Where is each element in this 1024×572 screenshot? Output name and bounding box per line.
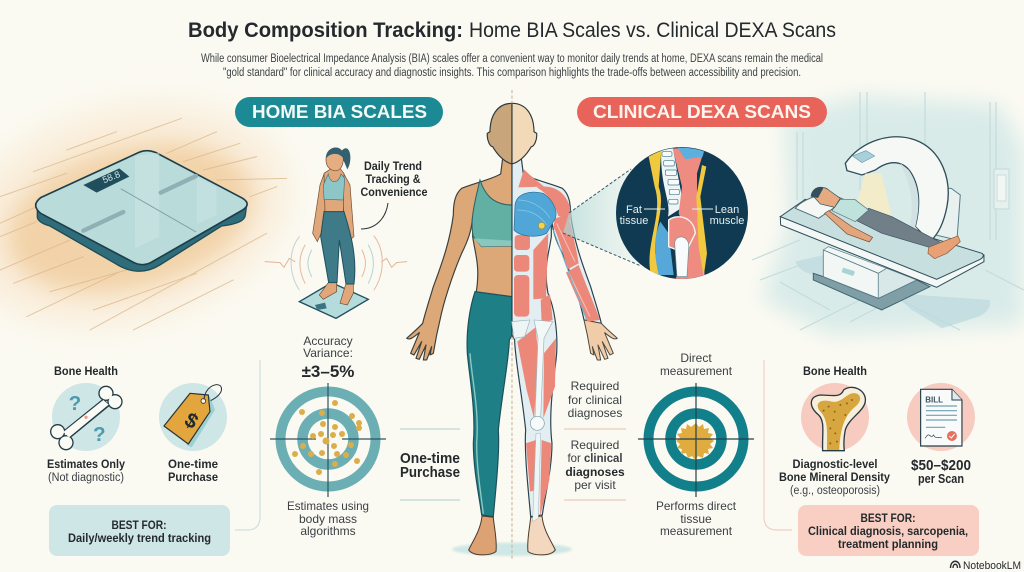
caption: estimates using algorithms: Estimates using xyxy=(287,499,369,513)
leggings xyxy=(467,292,512,517)
sports bra xyxy=(472,180,512,247)
left feature bracket xyxy=(235,360,260,530)
block: diagnostic bone density: Bone Mineral Density xyxy=(779,470,890,484)
icon: woman standing on scale xyxy=(265,147,407,318)
text block: required for clinical diagnoses: diagnoses xyxy=(565,465,625,479)
block: one-time purchase tag: Purchase xyxy=(168,470,218,484)
best for box: clinical xyxy=(798,505,979,556)
block: one-time purchase tag xyxy=(159,383,227,484)
head and hair xyxy=(342,148,350,169)
block: bone health estimates: ? xyxy=(93,423,106,446)
feet xyxy=(319,282,337,299)
left half skin xyxy=(407,158,512,360)
block: bone health estimates: (Not diagnostic) xyxy=(48,472,124,484)
text block: required for clinical diagnoses: per visit xyxy=(574,478,616,492)
block: bone health estimates: Estimates Only xyxy=(47,457,125,471)
title: Home BIA Scales vs. Clinical DEXA Scans xyxy=(469,19,836,42)
icon: bathroom scale: 58.8 xyxy=(101,169,122,185)
cost label: one-time purchase: One-time xyxy=(400,450,460,467)
best for box: home: Daily/weekly trend tracking xyxy=(68,533,211,545)
text block: required for clinical diagnoses xyxy=(564,379,626,500)
best for box: home xyxy=(49,505,230,556)
intro paragraph xyxy=(201,53,823,79)
caption: performs direct measurement: Performs direct xyxy=(656,499,737,513)
accuracy variance label: ±3–5% xyxy=(302,362,354,381)
table xyxy=(780,217,984,287)
callout: daily trend xyxy=(360,161,428,229)
text block: required for clinical diagnoses: for clinical xyxy=(568,393,622,407)
zoom callout: fat tissue and lean muscle xyxy=(563,147,748,280)
block: diagnostic bone density: (e.g., osteoporosis) xyxy=(790,485,880,497)
zoom callout: fat tissue and lean muscle: muscle xyxy=(710,215,744,227)
heading pill: Home BIA Scales: HOME BIA SCALES xyxy=(252,102,427,122)
block: DEXA bill cost: $50–$200 xyxy=(911,457,971,474)
block: bone health estimates: ? xyxy=(69,392,81,415)
caption: direct measurement xyxy=(660,351,733,378)
title: Body Composition Tracking: xyxy=(188,19,463,42)
zoom callout: fat tissue and lean muscle: Fat xyxy=(626,204,642,216)
caption: estimates using algorithms: body mass xyxy=(299,512,357,526)
caption: estimates using algorithms: algorithms xyxy=(300,524,356,538)
accuracy variance label xyxy=(302,334,354,381)
heading pill: Clinical DEXA Scans: CLINICAL DEXA SCANS xyxy=(593,102,811,122)
NotebookLM watermark: NotebookLM xyxy=(963,560,1021,572)
block: one-time purchase tag: $ xyxy=(181,408,202,434)
block: DEXA bill cost: per Scan xyxy=(918,472,964,486)
heading pill: Clinical DEXA Scans xyxy=(577,97,827,127)
cost label: one-time purchase: Purchase xyxy=(400,464,460,481)
block: bone health estimates xyxy=(47,366,125,484)
block: diagnostic bone density: Bone Health xyxy=(803,366,867,378)
left foot xyxy=(469,516,496,555)
left head xyxy=(487,103,512,164)
block: DEXA bill cost: BILL xyxy=(925,395,943,404)
best for box: home: BEST FOR: xyxy=(112,520,166,532)
centre dashed divider xyxy=(510,90,513,560)
block: one-time purchase tag: One-time xyxy=(168,457,218,471)
caption: performs direct measurement: tissue xyxy=(680,512,712,526)
arms xyxy=(313,174,326,242)
caption: estimates using algorithms xyxy=(287,499,369,538)
zoom callout: fat tissue and lean muscle: Lean xyxy=(715,204,739,216)
icon: bathroom scale xyxy=(36,151,247,271)
heading pill: Home BIA Scales xyxy=(235,97,443,127)
wood floor background xyxy=(0,73,311,357)
callout: daily trend: Daily Trend xyxy=(364,161,422,173)
leggings xyxy=(321,212,355,284)
accuracy variance label: Accuracy xyxy=(303,334,353,348)
text block: required for clinical diagnoses: Required xyxy=(571,438,619,452)
caption: performs direct measurement xyxy=(656,499,737,538)
top xyxy=(323,174,345,200)
target chart: home scatter xyxy=(270,383,386,497)
base xyxy=(813,273,930,310)
arc xyxy=(845,137,948,242)
caption: performs direct measurement: measurement xyxy=(660,524,733,538)
block: diagnostic bone density xyxy=(779,366,890,497)
best for box: clinical: Clinical diagnosis, sarcopenia, xyxy=(808,526,968,538)
best for box: clinical: treatment planning xyxy=(838,539,938,551)
text block: required for clinical diagnoses: diagnoses xyxy=(568,406,622,420)
leg bones xyxy=(512,320,530,338)
pectoral xyxy=(514,192,556,236)
clinic room background xyxy=(752,92,1024,335)
right feature bracket xyxy=(764,360,792,530)
column xyxy=(924,188,960,240)
central body split figure xyxy=(407,90,617,560)
block: bone health estimates: Bone Health xyxy=(54,366,118,378)
icon: DEXA scanner xyxy=(780,137,990,328)
text block: required for clinical diagnoses: for clinical xyxy=(568,451,622,465)
target chart: DEXA precise xyxy=(638,383,754,497)
block: DEXA bill cost xyxy=(907,383,975,486)
block: diagnostic bone density: Diagnostic-level xyxy=(792,457,878,471)
intro paragraph: "gold standard" for clinical accuracy and diagnostic insights. This comparison highlights the trade-offs between accessibility and precision. xyxy=(223,67,801,79)
torso xyxy=(324,168,344,212)
muscles xyxy=(514,169,600,517)
callout: daily trend: Tracking & xyxy=(366,174,420,186)
best for box: clinical: BEST FOR: xyxy=(860,513,916,525)
patient xyxy=(855,208,945,247)
caption: direct measurement: Direct xyxy=(680,351,712,365)
zoom callout: fat tissue and lean muscle: tissue xyxy=(620,215,648,227)
caption: direct measurement: measurement xyxy=(660,364,733,378)
callout: daily trend: Convenience xyxy=(360,187,428,199)
title xyxy=(188,19,836,42)
pillow xyxy=(795,193,845,218)
intro paragraph: While consumer Bioelectrical Impedance Analysis (BIA) scales offer a convenient way to monitor daily trends at home, DEXA scans remain the medical xyxy=(201,53,823,65)
text block: required for clinical diagnoses: Required xyxy=(571,379,619,393)
pedestal xyxy=(823,247,887,273)
shadows xyxy=(893,293,990,328)
accuracy variance label: Variance: xyxy=(303,346,353,360)
cost label: one-time purchase xyxy=(400,429,460,500)
right silhouette xyxy=(512,103,617,555)
